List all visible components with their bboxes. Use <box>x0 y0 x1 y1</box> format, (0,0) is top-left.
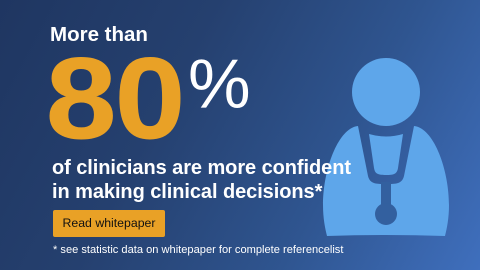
button: Read whitepaper <box>53 210 165 237</box>
text: statistic description <box>52 157 351 203</box>
footnote: * see statistic data on whitepaper for complete referencelist <box>53 244 343 256</box>
text: statistic description: in making clinical decisions* <box>52 181 322 203</box>
button: Read whitepaper: Read whitepaper <box>62 216 155 230</box>
big number: 80: 80 <box>46 35 184 163</box>
text: statistic description: of clinicians are more confident <box>52 157 351 179</box>
heading: More than: More than <box>50 23 148 46</box>
percent sign: % <box>188 45 251 122</box>
